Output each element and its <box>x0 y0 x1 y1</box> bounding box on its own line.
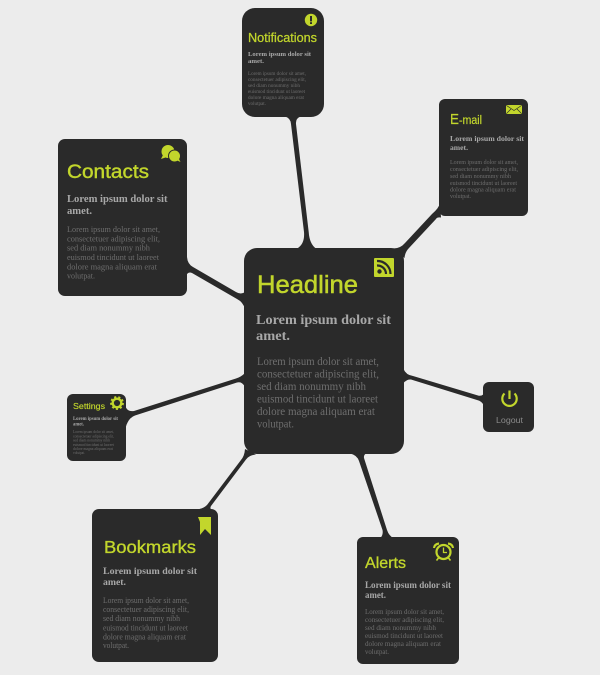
body text: consectetuer adipiscing elit, <box>365 615 444 624</box>
body text: volutpat. <box>248 101 267 107</box>
body text: dolore magna aliquam erat <box>257 405 376 418</box>
label: logout: Logout <box>496 415 524 425</box>
subheading: Lorem ipsum dolor sit <box>73 417 118 422</box>
icon: gear <box>111 397 123 409</box>
connector: settings to headline <box>126 373 245 428</box>
body text <box>248 71 307 107</box>
body text: euismod tincidunt ut laoreet <box>73 443 115 447</box>
body text: sed diam nonummy nibh <box>67 243 151 253</box>
heading: contacts: Contacts <box>67 162 149 183</box>
body text: Lorem ipsum dolor sit amet, <box>450 159 518 166</box>
body text <box>365 607 444 656</box>
body text: consectetuer adipiscing elit, <box>248 77 307 83</box>
subheading <box>450 134 524 152</box>
body text <box>73 430 115 455</box>
subheading: Lorem ipsum dolor sit <box>248 51 312 58</box>
body text <box>103 596 189 650</box>
body text: dolore magna aliquam erat <box>450 186 516 194</box>
body text <box>450 159 518 200</box>
body text <box>67 224 160 280</box>
subheading: Lorem ipsum dolor sit <box>67 194 168 205</box>
body text: Lorem ipsum dolor sit amet, <box>257 355 379 368</box>
panel: contacts <box>58 139 187 296</box>
body text <box>257 355 379 430</box>
heading: alerts: Alerts <box>365 555 406 572</box>
body text: Lorem ipsum dolor sit amet, <box>67 224 160 234</box>
connector: contacts to headline <box>187 257 245 309</box>
body text: consectetuer adipiscing elit, <box>103 605 189 614</box>
heading: e-mail: E-mail <box>450 112 482 128</box>
body text: volutpat. <box>257 418 294 430</box>
body text: dolore magna aliquam erat <box>67 262 158 272</box>
subheading <box>73 417 118 428</box>
heading: headline: Headline <box>257 271 358 299</box>
icon: envelope <box>506 105 522 114</box>
panel: e-mail <box>439 99 528 216</box>
subheading: Lorem ipsum dolor sit <box>103 566 198 577</box>
body text: volutpat. <box>365 647 389 656</box>
body text: dolore magna aliquam erat <box>248 95 304 101</box>
subheading: amet. <box>67 206 92 217</box>
body text: dolore magna aliquam erat <box>73 447 114 451</box>
subheading: Lorem ipsum dolor sit <box>256 313 391 328</box>
subheading: Lorem ipsum dolor sit <box>450 134 524 143</box>
body text: sed diam nonummy nibh <box>248 83 300 89</box>
body text: consectetuer adipiscing elit, <box>67 234 160 244</box>
subheading: amet. <box>256 329 290 344</box>
body text: consectetuer adipiscing elit, <box>450 166 518 173</box>
subheading: amet. <box>450 143 468 152</box>
connector: alerts to headline <box>350 454 394 538</box>
subheading <box>256 313 391 344</box>
icon: exclamation <box>305 14 317 26</box>
body text: sed diam nonummy nibh <box>450 173 512 180</box>
body text: consectetuer adipiscing elit, <box>73 434 114 439</box>
subheading: amet. <box>103 577 126 588</box>
panel: settings <box>67 394 126 461</box>
body text: euismod tincidunt ut laoreet <box>365 631 444 640</box>
body text: volutpat. <box>103 641 129 650</box>
body text: volutpat. <box>73 451 85 455</box>
icon: alarm clock <box>434 544 453 560</box>
subheading <box>365 580 451 600</box>
icon: power <box>502 390 517 406</box>
subheading <box>248 51 312 65</box>
body text: euismod tincidunt ut laoreet <box>450 180 517 187</box>
connector: logout to headline <box>404 369 484 406</box>
body text: consectetuer adipiscing elit, <box>257 368 379 380</box>
body text: sed diam nonummy nibh <box>103 614 180 623</box>
body text: sed diam nonummy nibh <box>73 439 110 443</box>
connector: bookmarks to headline <box>196 449 256 510</box>
icon: chat bubbles <box>161 145 180 162</box>
heading: bookmarks: Bookmarks <box>104 537 196 557</box>
panel: bookmarks <box>92 509 218 662</box>
body text: euismod tincidunt ut laoreet <box>103 624 189 632</box>
connector: notifications to headline <box>285 116 316 248</box>
icon: bookmark <box>198 517 211 535</box>
body text: volutpat. <box>450 193 471 200</box>
panel: headline <box>244 248 404 454</box>
body text: Lorem ipsum dolor sit amet, <box>365 607 444 616</box>
body text: euismod tincidunt ut laoreet <box>67 252 160 262</box>
body text: Lorem ipsum dolor sit amet, <box>248 71 307 77</box>
heading: settings: Settings <box>73 401 105 411</box>
panel: notifications <box>242 8 324 117</box>
body text: dolore magna aliquam erat <box>103 632 187 642</box>
connector: e-mail to headline <box>392 203 441 258</box>
panel: alerts <box>357 537 459 664</box>
body text: sed diam nonummy nibh <box>257 380 366 393</box>
body text: euismod tincidunt ut laoreet <box>257 392 379 406</box>
icon: rss <box>374 258 394 277</box>
subheading: Lorem ipsum dolor sit <box>365 580 451 590</box>
heading: notifications: Notifications <box>248 31 317 45</box>
subheading <box>103 566 198 588</box>
panel: logout <box>483 382 534 432</box>
body text: euismod tincidunt ut laoreet <box>248 89 305 95</box>
subheading: amet. <box>365 590 386 600</box>
subheading: amet. <box>248 58 264 65</box>
body text: dolore magna aliquam erat <box>365 639 442 648</box>
subheading <box>67 194 168 217</box>
subheading: amet. <box>73 422 84 428</box>
body text: sed diam nonummy nibh <box>365 623 436 632</box>
body text: Lorem ipsum dolor sit amet, <box>103 596 189 605</box>
body text: volutpat. <box>67 270 95 280</box>
body text: Lorem ipsum dolor sit amet, <box>73 430 114 435</box>
